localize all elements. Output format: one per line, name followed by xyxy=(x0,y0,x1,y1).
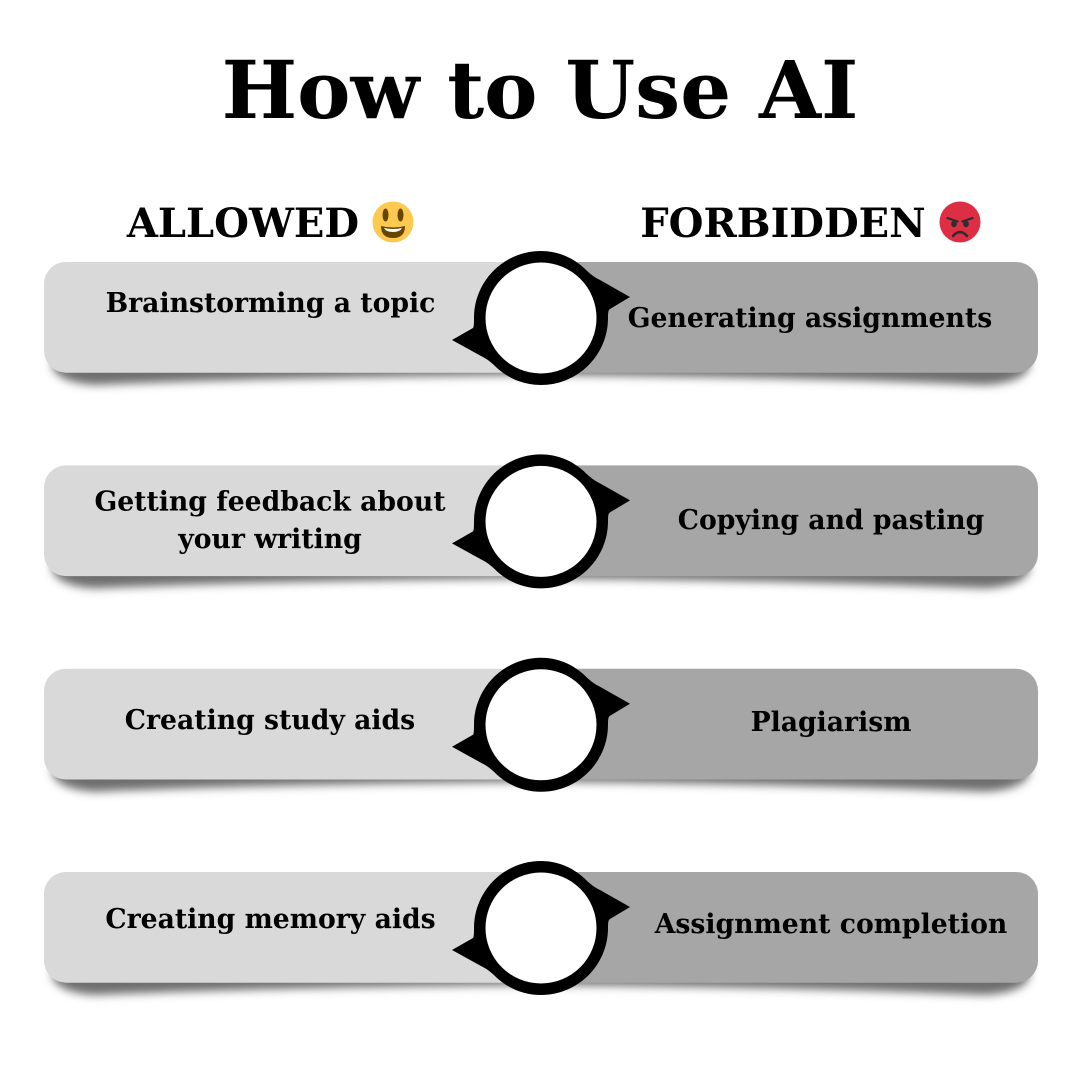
panel: allowed bar xyxy=(44,262,541,373)
icon: smiling face xyxy=(372,202,414,242)
text: forbidden item: Assignment completion xyxy=(654,909,1007,940)
text: forbidden item: Generating assignments xyxy=(628,303,992,334)
panel: allowed bar xyxy=(44,669,541,780)
icon: angry face xyxy=(940,202,980,242)
text: allowed item: Creating study aids xyxy=(125,705,415,736)
text: allowed item: Brainstorming a topic xyxy=(106,288,435,319)
title: How to Use AI xyxy=(222,43,858,137)
speech-bubble circle xyxy=(452,658,630,792)
panel: forbidden bar xyxy=(541,262,1038,373)
panel: forbidden bar xyxy=(541,465,1038,576)
speech-bubble circle xyxy=(452,454,630,588)
text: forbidden item: Copying and pasting xyxy=(678,505,985,536)
panel: allowed bar xyxy=(44,872,541,983)
row 4 xyxy=(44,861,1038,995)
heading: forbidden: FORBIDDEN xyxy=(640,200,926,247)
panel: forbidden bar xyxy=(541,872,1038,983)
text: allowed item: Creating memory aids xyxy=(105,904,436,935)
speech-bubble circle xyxy=(452,251,630,385)
panel: forbidden bar xyxy=(541,669,1038,780)
text: allowed item: Getting feedback about xyxy=(94,486,446,518)
row 2 xyxy=(44,454,1038,588)
speech-bubble circle xyxy=(452,861,630,995)
row 3 xyxy=(44,658,1038,792)
heading: allowed: ALLOWED xyxy=(126,200,359,247)
panel: allowed bar xyxy=(44,465,541,576)
row 1 xyxy=(44,251,1038,385)
text: allowed item second line: your writing xyxy=(177,524,362,555)
text: forbidden item: Plagiarism xyxy=(751,707,911,738)
